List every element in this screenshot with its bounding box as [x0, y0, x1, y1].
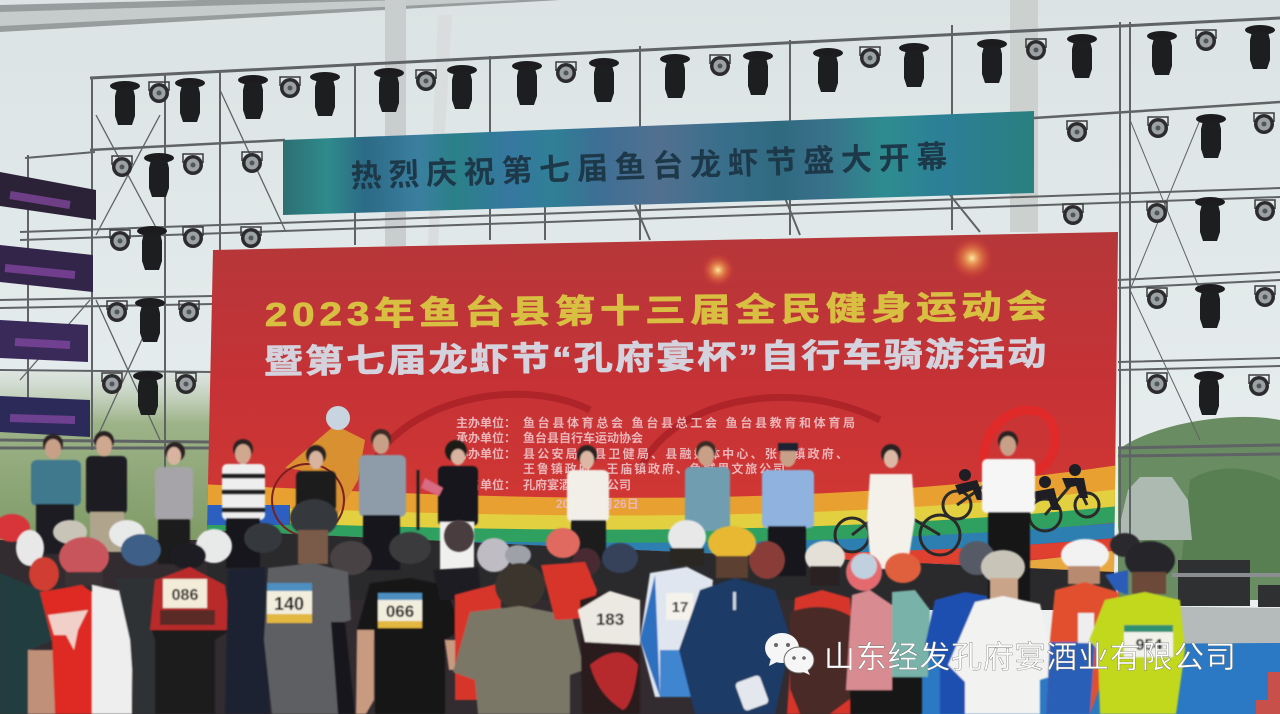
rider 140 — [264, 499, 355, 714]
rider: blue jersey — [925, 592, 987, 714]
stage lights: right column — [1063, 113, 1275, 415]
guest: striped shirt — [222, 439, 265, 568]
bib 140: 140 — [274, 594, 304, 614]
stage lights: top row — [110, 25, 1275, 125]
stage base and equipment — [207, 530, 1280, 645]
rider 066 — [356, 578, 462, 714]
background: grass and trees — [0, 372, 1280, 600]
organizer text: 王鲁镇政府、王庙镇政府、鱼城里文旅公司 — [523, 461, 785, 476]
main title line 1: 2023年鱼台县第十三届全民健身运动会 — [265, 288, 1047, 333]
guest: police officer — [762, 443, 814, 576]
rider: white cap red shirt — [1046, 539, 1128, 714]
rider: navy jacket, yellow helmet — [679, 526, 791, 714]
organizer text — [456, 415, 855, 511]
rider 086 — [150, 567, 231, 714]
bib 086 — [163, 579, 207, 608]
guest: grey top — [155, 442, 193, 564]
blue lower banner — [920, 643, 1280, 714]
icon: WeChat — [765, 633, 814, 675]
guest: blue-grey shirt — [31, 434, 81, 554]
swoosh loops — [370, 394, 880, 470]
organizer text: 2023年6月26日 — [556, 496, 639, 511]
watermark text: 山东经发孔府宴酒业有限公司 — [824, 640, 1236, 675]
stage guests — [31, 429, 1035, 602]
bib 17 — [666, 593, 693, 620]
bib 066: 066 — [386, 602, 414, 621]
left LED panels — [0, 172, 96, 437]
bikes artwork — [835, 480, 1099, 555]
rider: dark grey — [116, 578, 157, 714]
rider: lime jersey — [1089, 541, 1185, 714]
rider: dark top and red jersey behind — [433, 567, 505, 700]
rider 183 — [578, 591, 640, 714]
organizer text: 协办单位： — [456, 446, 516, 461]
rider: brown-red jersey — [787, 541, 856, 714]
guest: black shirt — [86, 431, 127, 552]
banner text: 热烈庆祝第七届鱼台龙虾节盛大开幕 — [350, 139, 948, 194]
bib 954: 954 — [1136, 637, 1162, 654]
rider: white polo — [948, 550, 1056, 714]
guest: white shirt — [982, 431, 1035, 602]
top banner — [283, 111, 1034, 215]
rider: navy — [225, 567, 270, 714]
bib 140 — [267, 583, 312, 623]
guest: blue shirt — [685, 441, 730, 531]
rider: olive shirt man — [453, 563, 584, 714]
organizer text: 冠名单位： — [456, 477, 516, 492]
organizer text: 鱼台县体育总会 鱼台县总工会 鱼台县教育和体育局 — [523, 415, 855, 430]
cyclists crowd — [0, 499, 1185, 714]
bib 183: 183 — [596, 610, 624, 629]
guest: grey polo — [359, 429, 406, 570]
organizer text: 主办单位： — [456, 415, 516, 430]
rider: dark green shirt — [0, 573, 55, 714]
main stage backdrop — [200, 232, 1120, 585]
guest: white blouse — [567, 445, 609, 560]
glow lights — [704, 256, 732, 284]
stage lights: left column — [102, 152, 262, 415]
stage roof beam and pillars — [0, 0, 1038, 246]
organizer text: 承办单位： — [456, 430, 516, 445]
guest: white dress — [867, 444, 915, 569]
rainbow band — [200, 478, 1120, 585]
rider: mint hoodie — [885, 553, 930, 714]
rider: blue white jersey — [640, 520, 713, 697]
rider: red jersey — [40, 537, 118, 714]
organizer text: 鱼台县自行车运动协会 — [523, 430, 643, 445]
back-row helmets — [53, 520, 1140, 579]
guest: speaker at podium — [418, 440, 478, 570]
main title line 2: 暨第七届龙虾节“孔府宴杯”自行车骑游活动 — [264, 335, 1046, 380]
watermark — [765, 633, 1236, 675]
organizer text: 孔府宴酒业有限公司 — [523, 477, 631, 492]
crowd backdrop shadow — [0, 540, 920, 714]
bib 086: 086 — [172, 587, 198, 604]
rider: red jersey behind — [541, 562, 597, 620]
organizer text: 县公安局、县卫健局、县融媒体中心、张黄镇政府、 — [523, 446, 848, 461]
bib 954 — [1124, 625, 1173, 657]
rider: white shirt — [92, 585, 143, 714]
bib 17: 17 — [672, 599, 688, 616]
rider: far-left helmets — [0, 514, 59, 591]
cyclist artwork — [285, 425, 365, 520]
guest: woman in black — [296, 445, 336, 511]
truss scaffold — [0, 18, 1280, 540]
rider: pink hoodie — [846, 553, 897, 714]
